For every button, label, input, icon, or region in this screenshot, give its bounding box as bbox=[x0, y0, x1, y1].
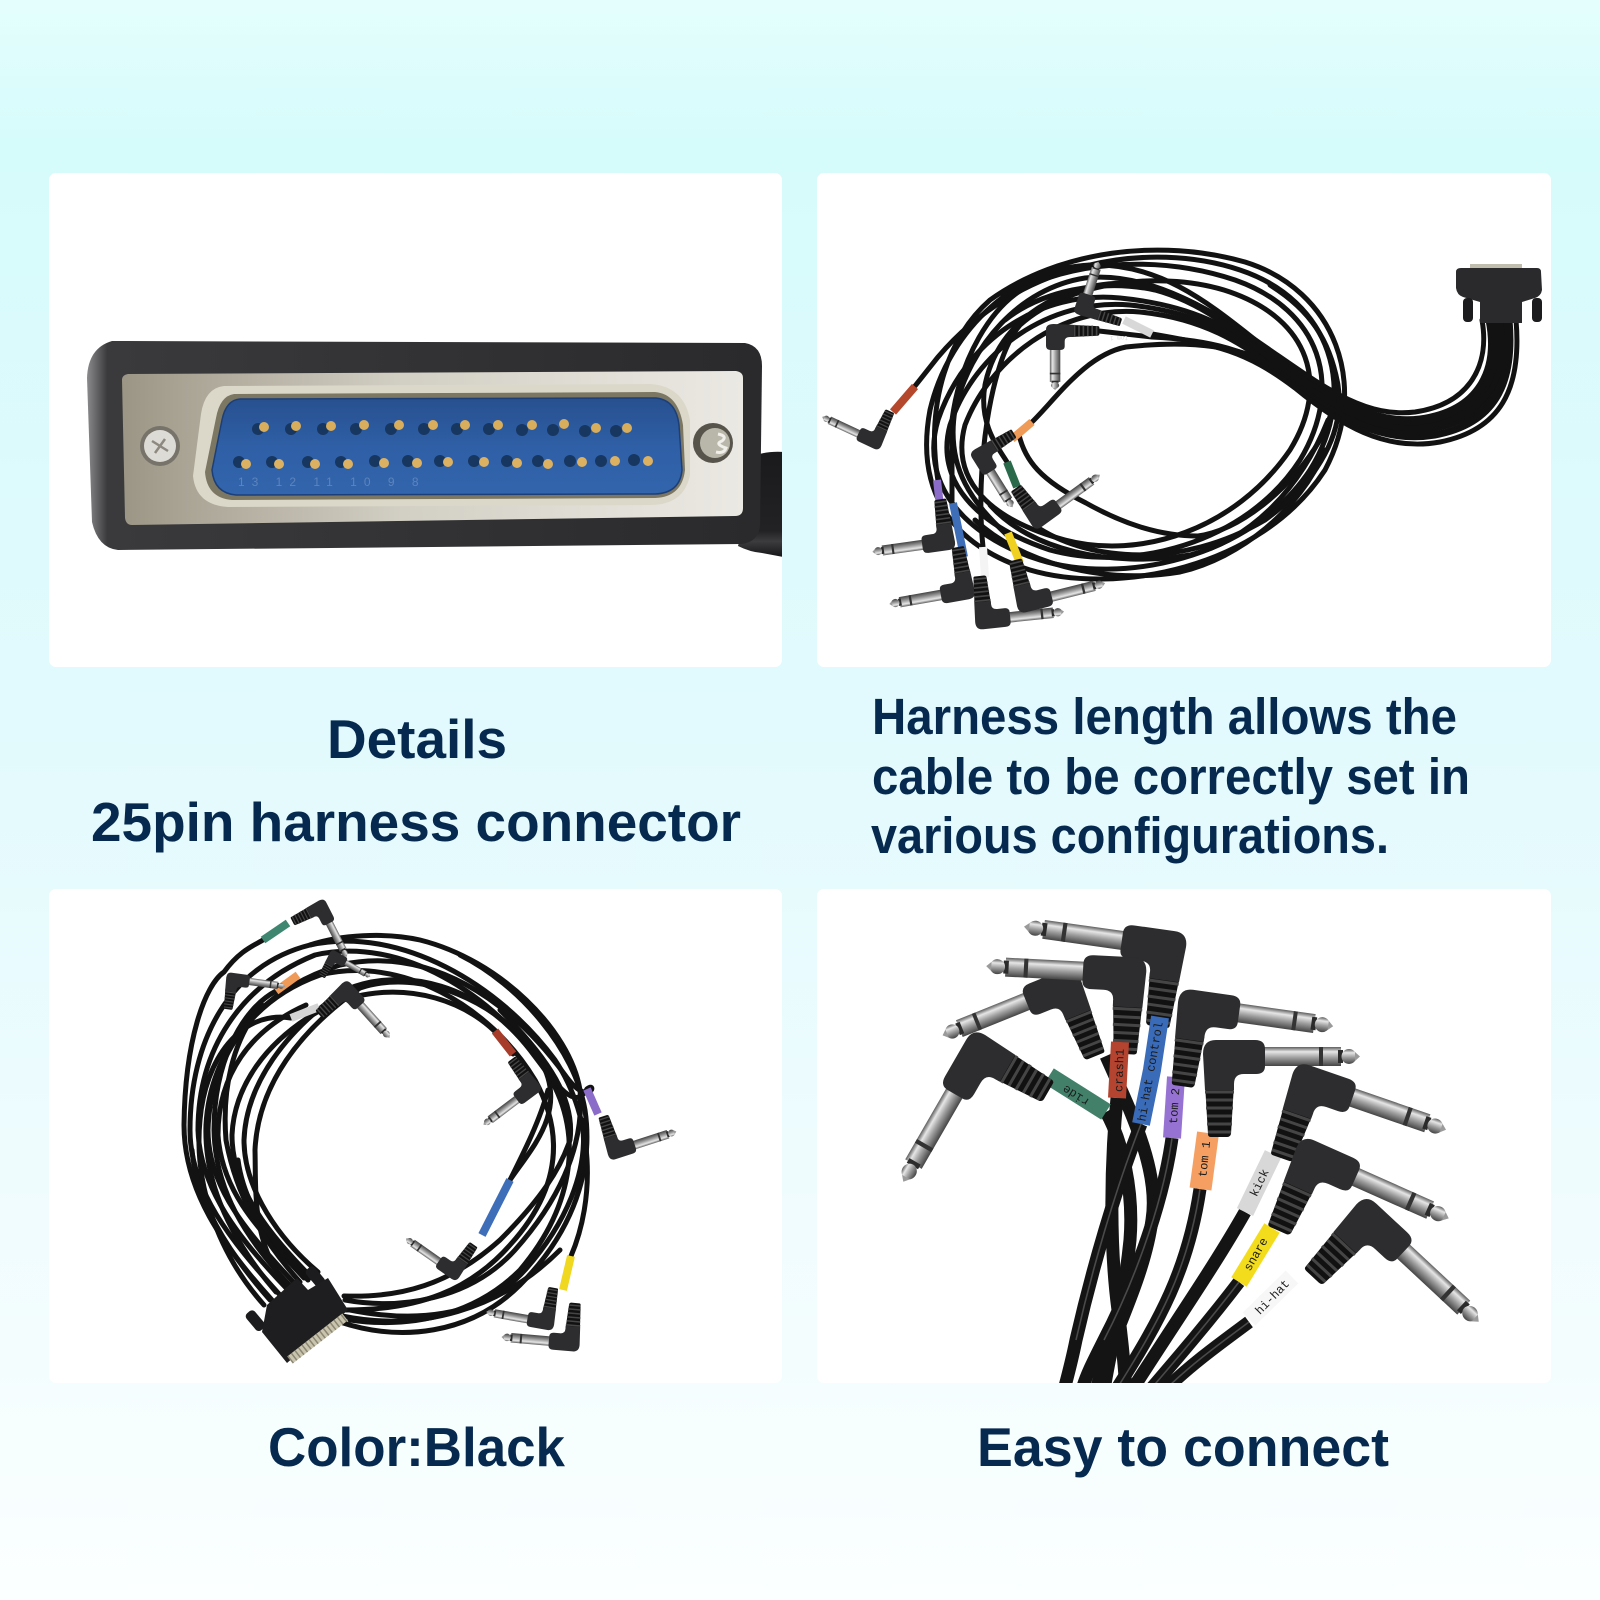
label: blue bbox=[953, 503, 964, 557]
jack: last bbox=[501, 1297, 583, 1352]
panel: full harness bbox=[817, 173, 1551, 667]
caption: Details: Details bbox=[327, 708, 507, 770]
upper pins bbox=[252, 419, 632, 437]
label: green bbox=[1007, 462, 1017, 487]
jack: purple bbox=[596, 1096, 679, 1161]
shell inner rim bbox=[205, 392, 685, 500]
caption: harness length: various configurations. bbox=[871, 807, 1389, 864]
connector bbox=[244, 1265, 348, 1363]
jack: kick bbox=[1073, 259, 1137, 328]
jack: orange bbox=[969, 427, 1047, 512]
left screw bbox=[140, 426, 180, 466]
jack: yellow bbox=[485, 1277, 560, 1331]
label: yellow bbox=[1008, 533, 1020, 563]
jack: hi-hat bbox=[1304, 1199, 1479, 1322]
jack: white bbox=[970, 568, 1065, 630]
connector body bbox=[87, 341, 762, 550]
jack: purple bbox=[866, 498, 956, 561]
jack: third bbox=[942, 978, 1104, 1060]
caption: Easy to connect: Easy to connect bbox=[977, 1416, 1389, 1478]
caption: Color:Black: Color:Black bbox=[268, 1416, 565, 1478]
jack: green bbox=[289, 898, 353, 972]
label: orange bbox=[276, 975, 298, 991]
panel: color-coded jacks bbox=[817, 889, 1551, 1390]
jack: yellow bbox=[1006, 540, 1107, 614]
label: kick: kick bbox=[1247, 1167, 1273, 1199]
cable stub bbox=[738, 452, 783, 557]
label: tom 1 bbox=[1196, 1133, 1214, 1189]
lower pins bbox=[233, 454, 653, 469]
cables bbox=[1064, 1056, 1249, 1390]
panel: DB25 connector close-up bbox=[49, 173, 783, 667]
pin numbers: 13 12 11 10 9 8 bbox=[238, 475, 426, 489]
label: tom 2 bbox=[1167, 1077, 1183, 1138]
D-shell bbox=[193, 384, 690, 507]
caption: harness length: Harness length allows the bbox=[872, 688, 1457, 745]
jack fan bbox=[889, 910, 1490, 1390]
label: snare: snare bbox=[1241, 1236, 1271, 1274]
jack: blue bbox=[402, 1211, 479, 1282]
label: gray bbox=[291, 1007, 319, 1018]
metal plate bbox=[122, 371, 743, 525]
label: tom 2: tom 2 bbox=[1167, 1088, 1183, 1125]
jack: snare bbox=[1268, 1138, 1449, 1234]
label: snare bbox=[1239, 1228, 1272, 1282]
label: yellow bbox=[563, 1256, 571, 1290]
label: kick bbox=[1124, 320, 1152, 334]
jack: kick bbox=[1271, 1064, 1446, 1162]
jack: hi-hat control bbox=[1024, 920, 1186, 1028]
caption: harness length: cable to be correctly set in bbox=[872, 748, 1470, 805]
cable: blue run bbox=[510, 1090, 548, 1180]
label: kick bbox=[1245, 1154, 1273, 1212]
cable coil bbox=[184, 935, 592, 1332]
right screw bbox=[693, 423, 733, 463]
label: orange bbox=[1012, 422, 1032, 439]
label: purple bbox=[937, 480, 940, 506]
jack: blue bbox=[882, 545, 976, 613]
label: green bbox=[263, 923, 288, 940]
caption: 25pin harness connector: 25pin harness connector bbox=[91, 791, 741, 853]
jack: crash bbox=[982, 950, 1147, 1055]
photo: D-sub connector bbox=[87, 341, 783, 557]
caption: harness length bbox=[871, 688, 1470, 864]
label: red bbox=[893, 386, 915, 412]
label: purple bbox=[587, 1089, 598, 1114]
jack: red bbox=[462, 1055, 543, 1131]
jack: green bbox=[1009, 443, 1105, 531]
panel: coiled harness bbox=[49, 889, 782, 1383]
label: ride: ride bbox=[1060, 1081, 1092, 1109]
jack: second bbox=[317, 949, 373, 998]
label: ride bbox=[1049, 1076, 1106, 1112]
jack: tom 2 bbox=[1172, 990, 1334, 1088]
label: blue bbox=[482, 1180, 510, 1235]
cable loop bbox=[915, 250, 1517, 579]
jack: ride bbox=[902, 1032, 1054, 1182]
jack: third bbox=[222, 972, 286, 1017]
label: hi-hat: hi-hat bbox=[1253, 1277, 1293, 1318]
jack: red bbox=[819, 386, 896, 451]
jack: tom 1 bbox=[1203, 1040, 1360, 1137]
label: tom 1: tom 1 bbox=[1196, 1140, 1214, 1178]
label: hi-hat control: hi-hat control bbox=[1135, 1021, 1167, 1123]
label: tom text: tom 1 bbox=[1110, 334, 1128, 341]
blue insert bbox=[212, 398, 682, 495]
jack: tom bbox=[1046, 324, 1099, 390]
label: white bbox=[983, 547, 985, 577]
label: red bbox=[495, 1031, 513, 1054]
label: crash: crash1 bbox=[1112, 1049, 1128, 1092]
jack: fourth bbox=[314, 979, 395, 1063]
connector bbox=[1456, 264, 1542, 323]
